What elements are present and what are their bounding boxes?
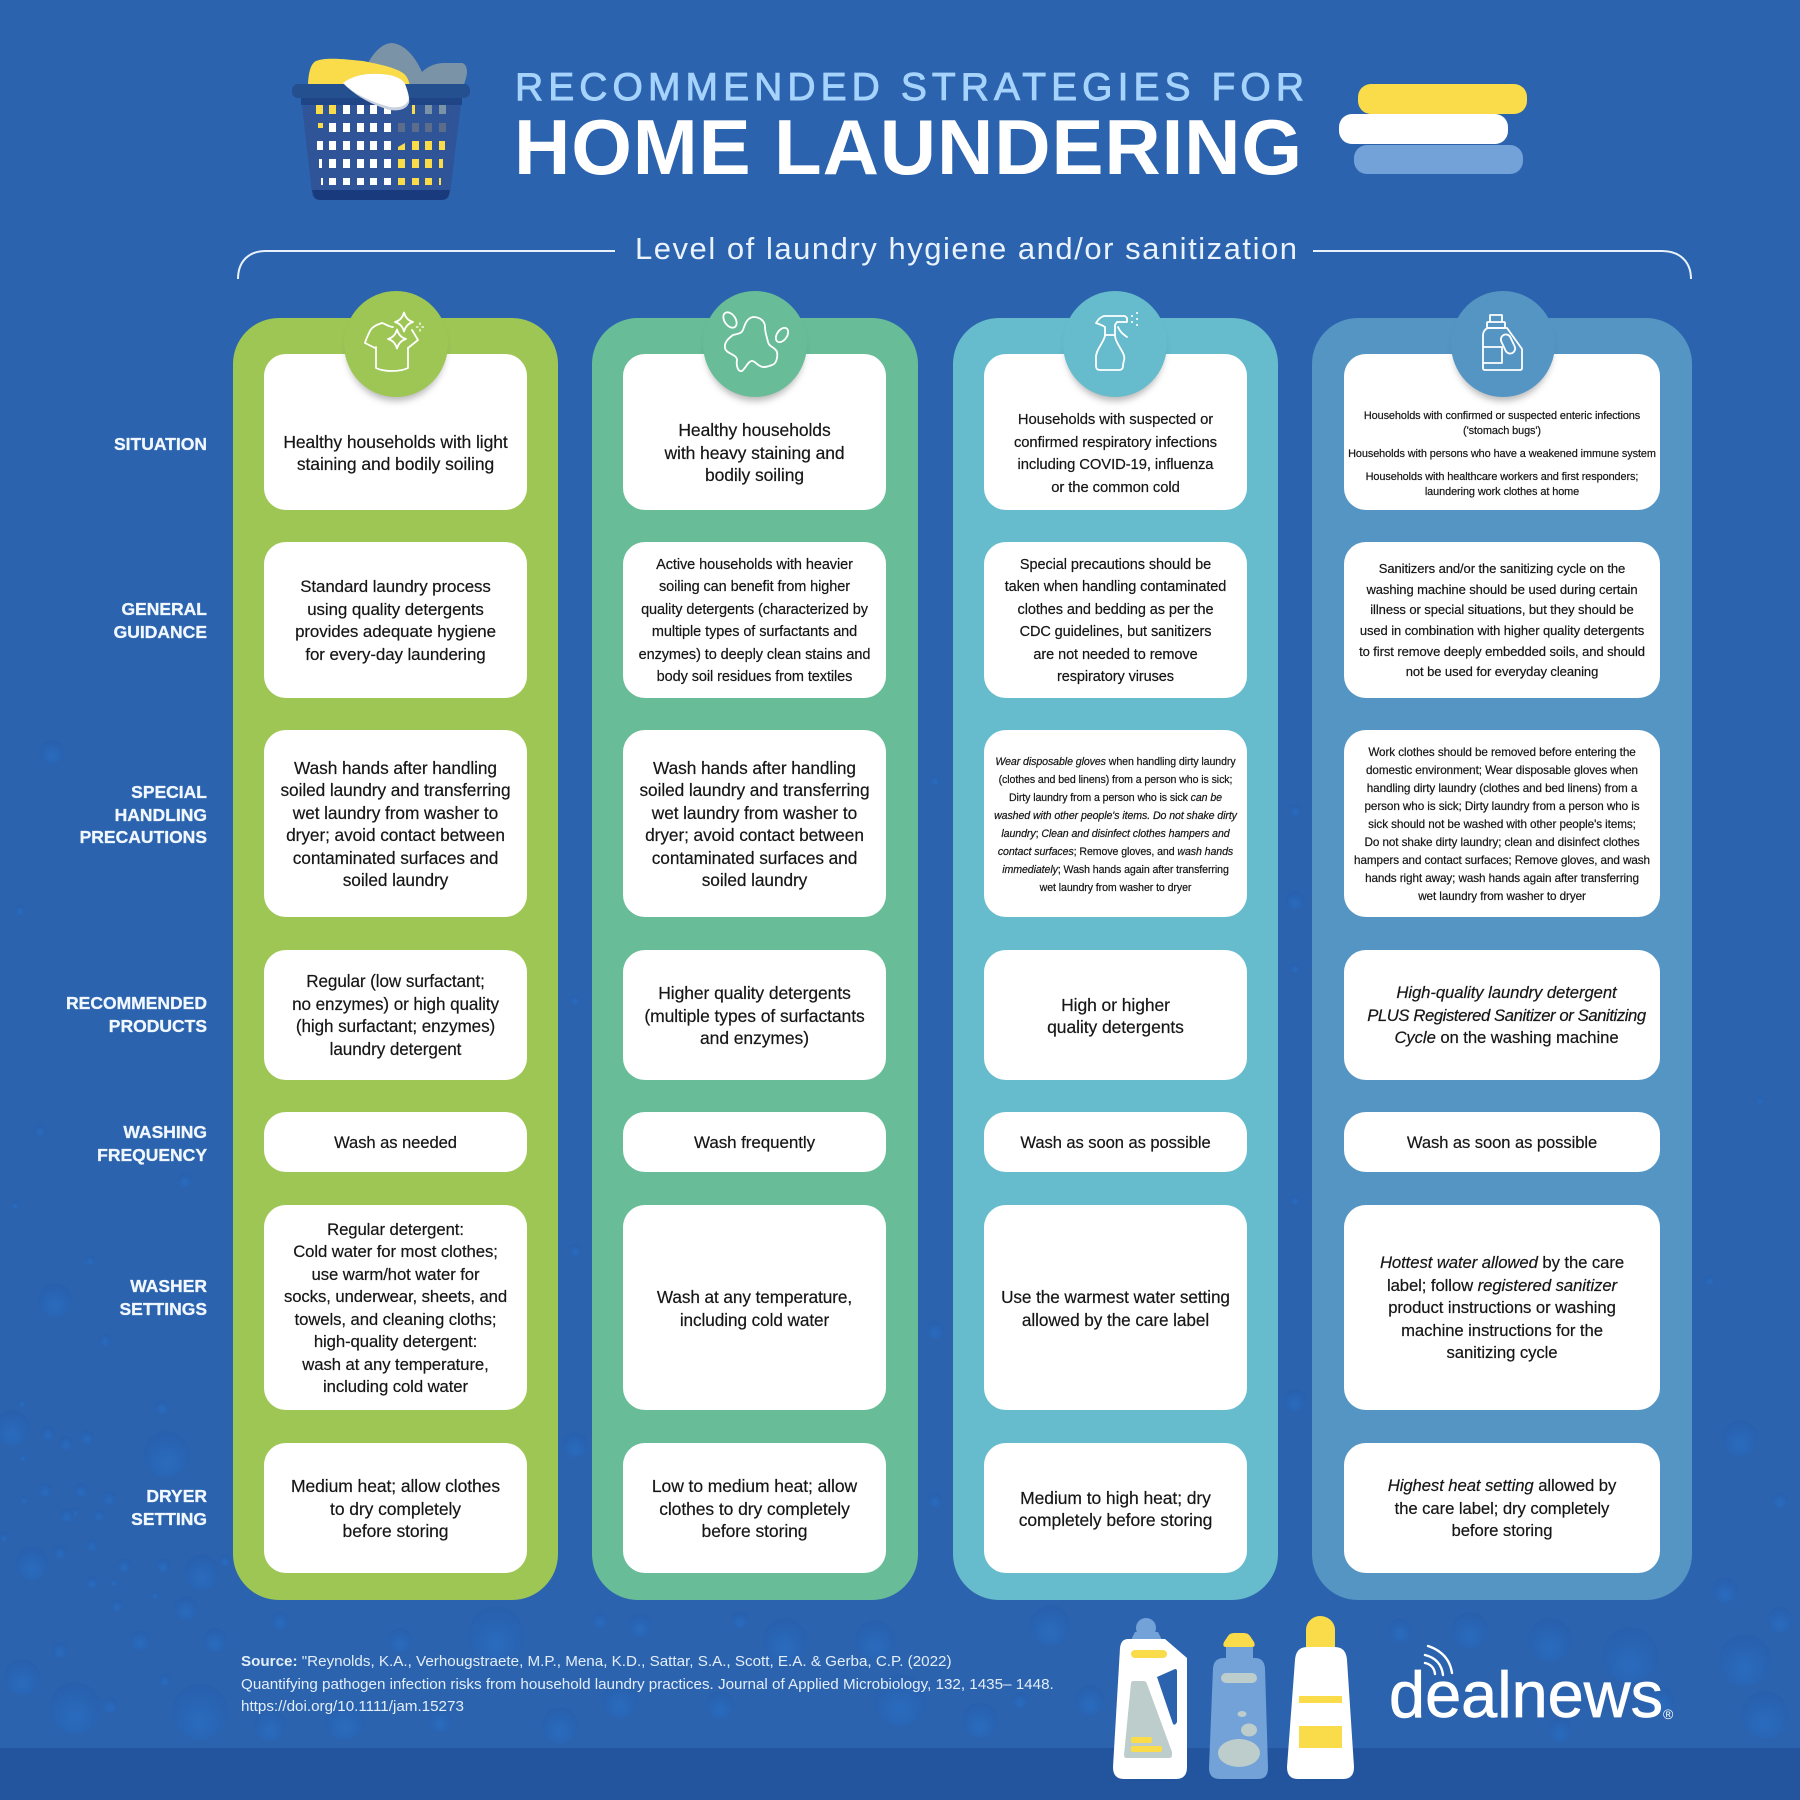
subtitle bracket: level of laundry hygiene: Level of laundry hygiene and/or sanitization bbox=[635, 231, 1297, 266]
washing frequency text bbox=[1344, 1112, 1660, 1172]
special handling text: Wash hands after handling bbox=[653, 758, 856, 778]
washer settings text: Regular detergent: bbox=[327, 1220, 464, 1238]
general guidance text bbox=[264, 542, 527, 698]
recommended products text: laundry detergent bbox=[330, 1040, 461, 1058]
special handling text: Do not shake dirty laundry; clean and disinfect clothes bbox=[1365, 836, 1639, 849]
special handling text: wet laundry from washer to dryer bbox=[1418, 890, 1586, 903]
dryer setting text: to dry completely bbox=[330, 1499, 461, 1519]
recommended products text: High-quality laundry detergent bbox=[1396, 983, 1617, 1002]
recommended products text: and enzymes) bbox=[700, 1028, 809, 1048]
general guidance text: enzymes) to deeply clean stains and bbox=[639, 646, 870, 662]
dryer setting text bbox=[1344, 1443, 1660, 1573]
situation text: Households with confirmed or suspected enteric infections bbox=[1364, 410, 1640, 422]
footer band bbox=[0, 1748, 1800, 1800]
dryer setting text: before storing bbox=[343, 1521, 448, 1541]
special handling text: domestic environment; Wear disposable gloves when bbox=[1366, 764, 1638, 777]
general guidance text: respiratory viruses bbox=[1057, 669, 1174, 685]
icon: detergent bottle bbox=[1451, 291, 1555, 397]
recommended products text: quality detergents bbox=[1047, 1017, 1184, 1037]
recommended products text bbox=[984, 950, 1247, 1080]
special handling text: soiled laundry bbox=[343, 870, 448, 890]
dryer setting text bbox=[264, 1443, 527, 1573]
washing frequency text: Wash as needed bbox=[334, 1133, 457, 1152]
washing frequency text: Wash as soon as possible bbox=[1407, 1133, 1597, 1152]
washing frequency text bbox=[984, 1112, 1247, 1172]
recommended products text: (high surfactant; enzymes) bbox=[296, 1017, 495, 1036]
row label: special handling precautions: HANDLING bbox=[115, 804, 207, 824]
special handling text: Dirty laundry from a person who is sick can be bbox=[1009, 792, 1222, 804]
situation text bbox=[984, 354, 1247, 510]
panel: healthy households, heavy soiling bbox=[592, 318, 918, 1600]
icon: folded towels stack bbox=[1339, 84, 1527, 174]
source citation: Quantifying pathogen infection risks from household laundry practices. Journal of Applied Microbiology, 132, 1435– 1448. bbox=[241, 1676, 1054, 1692]
row label: washer settings bbox=[119, 1276, 207, 1318]
washer settings text: Use the warmest water setting bbox=[1001, 1287, 1230, 1307]
washer settings text bbox=[984, 1205, 1247, 1410]
row label: special handling precautions bbox=[80, 782, 207, 847]
situation text: Households with suspected or bbox=[1018, 412, 1213, 428]
recommended products text: (multiple types of surfactants bbox=[644, 1006, 865, 1026]
row label: situation: SITUATION bbox=[114, 434, 207, 454]
row label: general guidance: GENERAL bbox=[121, 599, 207, 619]
subtitle bracket: level of laundry hygiene bbox=[237, 231, 1692, 279]
row label: recommended products: RECOMMENDED bbox=[66, 993, 207, 1013]
general guidance text: used in combination with higher quality detergents bbox=[1360, 623, 1644, 638]
special handling text: Wear disposable gloves when handling dirty laundry bbox=[995, 756, 1236, 768]
special handling text: soiled laundry and transferring bbox=[280, 780, 510, 800]
general guidance text: Sanitizers and/or the sanitizing cycle on the bbox=[1379, 561, 1625, 576]
washing frequency text bbox=[264, 1112, 527, 1172]
washer settings text: Cold water for most clothes; bbox=[293, 1242, 498, 1261]
washer settings text: including cold water bbox=[680, 1310, 829, 1330]
situation text: including COVID-19, influenza bbox=[1018, 457, 1213, 473]
panel: healthy households, light soiling bbox=[233, 318, 558, 1600]
special handling text: immediately; Wash hands again after transferring bbox=[1002, 864, 1229, 876]
special handling text: contact surfaces; Remove gloves, and wash hands bbox=[998, 846, 1233, 858]
special handling text: wet laundry from washer to dryer bbox=[1040, 882, 1191, 894]
general guidance text: multiple types of surfactants and bbox=[652, 624, 857, 640]
special handling text bbox=[984, 730, 1247, 917]
general guidance text: soiling can benefit from higher bbox=[659, 579, 850, 595]
washer settings text: wash at any temperature, bbox=[302, 1354, 489, 1374]
situation text bbox=[623, 354, 886, 510]
recommended products text bbox=[1344, 950, 1660, 1080]
dryer setting text: Medium to high heat; dry bbox=[1020, 1488, 1211, 1508]
recommended products text: Regular (low surfactant; bbox=[306, 972, 485, 991]
row label: general guidance bbox=[114, 599, 207, 642]
special handling text: wet laundry from washer to bbox=[652, 802, 857, 822]
washer settings text: towels, and cleaning cloths; bbox=[295, 1310, 496, 1328]
icon: spray bottle bbox=[1063, 291, 1167, 397]
general guidance text: Active households with heavier bbox=[656, 556, 853, 572]
special handling text: person who is sick; Dirty laundry from a person who is bbox=[1364, 800, 1640, 813]
special handling text: hands right away; wash hands again after transferring bbox=[1365, 872, 1639, 885]
row label: washing frequency bbox=[97, 1122, 207, 1165]
washing frequency text bbox=[623, 1112, 886, 1172]
washer settings text: machine instructions for the bbox=[1401, 1321, 1603, 1340]
special handling text bbox=[623, 730, 886, 917]
panel: enteric infections, weakened immunity, work clothes bbox=[1312, 318, 1692, 1600]
general guidance text: quality detergents (characterized by bbox=[641, 602, 868, 618]
recommended products text bbox=[264, 950, 527, 1080]
washer settings text: product instructions or washing bbox=[1388, 1298, 1616, 1317]
washer settings text: socks, underwear, sheets, and bbox=[284, 1287, 507, 1306]
special handling text: dryer; avoid contact between bbox=[645, 825, 864, 845]
dryer setting text: Medium heat; allow clothes bbox=[291, 1476, 500, 1496]
source citation: https://doi.org/10.1111/jam.15273 bbox=[241, 1698, 464, 1715]
logo: dealnews: dealnews bbox=[1389, 1658, 1663, 1731]
dryer setting text: Low to medium heat; allow bbox=[652, 1476, 857, 1496]
general guidance text: provides adequate hygiene bbox=[295, 622, 496, 641]
situation text: Healthy households bbox=[678, 420, 831, 440]
general guidance text: are not needed to remove bbox=[1033, 646, 1198, 662]
row label: recommended products bbox=[66, 993, 207, 1036]
general guidance text: washing machine should be used during certain bbox=[1366, 582, 1638, 597]
washer settings text bbox=[264, 1205, 527, 1410]
special handling text: hampers and contact surfaces; Remove gloves, and wash bbox=[1354, 854, 1650, 867]
situation text: Healthy households with light bbox=[283, 432, 508, 452]
general guidance text bbox=[1344, 542, 1660, 698]
dryer setting text: the care label; dry completely bbox=[1395, 1499, 1609, 1518]
row label: special handling precautions: SPECIAL bbox=[131, 782, 207, 802]
recommended products text bbox=[623, 950, 886, 1080]
general guidance text bbox=[623, 542, 886, 698]
washer settings text: Wash at any temperature, bbox=[657, 1287, 852, 1307]
row label: recommended products: PRODUCTS bbox=[109, 1016, 207, 1036]
dryer setting text bbox=[623, 1443, 886, 1573]
situation text: ('stomach bugs') bbox=[1463, 424, 1541, 436]
logo: dealnews: ® bbox=[1663, 1706, 1674, 1722]
general guidance text: Special precautions should be bbox=[1020, 556, 1211, 572]
washer settings text bbox=[623, 1205, 886, 1410]
situation text: Households with persons who have a weakened immune system bbox=[1348, 448, 1656, 460]
washing frequency text: Wash frequently bbox=[694, 1133, 815, 1152]
general guidance text: clothes and bedding as per the bbox=[1018, 602, 1213, 618]
dryer setting text: before storing bbox=[702, 1521, 807, 1541]
general guidance text: using quality detergents bbox=[307, 600, 484, 618]
dryer setting text: completely before storing bbox=[1019, 1510, 1212, 1530]
row label: washer settings: SETTINGS bbox=[119, 1298, 207, 1318]
situation text: with heavy staining and bbox=[664, 443, 845, 463]
special handling text: contaminated surfaces and bbox=[652, 848, 857, 868]
special handling text bbox=[1344, 730, 1660, 917]
bottle two bbox=[1209, 1633, 1268, 1779]
recommended products text: no enzymes) or high quality bbox=[292, 994, 499, 1014]
washer settings text: including cold water bbox=[323, 1377, 468, 1396]
dryer setting text bbox=[984, 1443, 1247, 1573]
special handling text: Wash hands after handling bbox=[294, 758, 497, 778]
row label: washer settings: WASHER bbox=[130, 1276, 207, 1296]
situation text: confirmed respiratory infections bbox=[1014, 434, 1217, 450]
situation text: bodily soiling bbox=[705, 465, 804, 485]
row label: general guidance: GUIDANCE bbox=[114, 622, 207, 642]
general guidance text: body soil residues from textiles bbox=[657, 669, 852, 685]
general guidance text: for every-day laundering bbox=[305, 644, 486, 664]
special handling text: laundry; Clean and disinfect clothes hampers and bbox=[1001, 828, 1230, 840]
special handling text: handling dirty laundry (clothes and bed linens) from a bbox=[1367, 782, 1637, 795]
special handling text: wet laundry from washer to bbox=[293, 802, 498, 822]
washer settings text: label; follow registered sanitizer bbox=[1387, 1276, 1617, 1295]
special handling text: dryer; avoid contact between bbox=[286, 825, 505, 845]
general guidance text: CDC guidelines, but sanitizers bbox=[1020, 624, 1211, 640]
washer settings text: Hottest water allowed by the care bbox=[1380, 1253, 1624, 1272]
washing frequency text: Wash as soon as possible bbox=[1020, 1133, 1211, 1152]
situation text: staining and bodily soiling bbox=[297, 454, 494, 474]
situation text: laundering work clothes at home bbox=[1425, 486, 1579, 498]
row label: dryer setting bbox=[131, 1486, 207, 1528]
washer settings text: allowed by the care label bbox=[1022, 1310, 1209, 1330]
general guidance text: illness or special situations, but they should be bbox=[1370, 602, 1634, 617]
icon: stain splat bbox=[703, 291, 807, 397]
recommended products text: Cycle on the washing machine bbox=[1394, 1028, 1619, 1047]
situation text: Households with healthcare workers and first responders; bbox=[1366, 470, 1638, 482]
special handling text: soiled laundry bbox=[702, 870, 807, 890]
special handling text: contaminated surfaces and bbox=[293, 848, 498, 868]
general guidance text bbox=[984, 542, 1247, 698]
dryer setting text: Highest heat setting allowed by bbox=[1388, 1476, 1616, 1495]
special handling text: (clothes and bed linens) from a person who is sick; bbox=[999, 774, 1232, 786]
row label: washing frequency: WASHING bbox=[123, 1122, 207, 1142]
special handling text bbox=[264, 730, 527, 917]
special handling text: soiled laundry and transferring bbox=[640, 780, 870, 800]
icon: sparkling shirt bbox=[344, 291, 448, 397]
row label: dryer setting: DRYER bbox=[146, 1486, 207, 1506]
source citation: Source: "Reynolds, K.A., Verhougstraete, M.P., Mena, K.D., Sattar, S.A., Scott, E.A. & Gerba, C.P. (2022) bbox=[241, 1653, 952, 1670]
general guidance text: Standard laundry process bbox=[300, 577, 491, 596]
special handling text: Work clothes should be removed before entering the bbox=[1368, 746, 1636, 759]
recommended products text: High or higher bbox=[1061, 994, 1170, 1014]
recommended products text: PLUS Registered Sanitizer or Sanitizing bbox=[1367, 1006, 1646, 1025]
panel: respiratory infections bbox=[953, 318, 1278, 1600]
special handling text: washed with other people's items. Do not shake dirty bbox=[994, 810, 1237, 822]
special handling text: sick should not be washed with other people's items; bbox=[1368, 818, 1636, 831]
washer settings text: use warm/hot water for bbox=[312, 1264, 479, 1284]
dryer setting text: clothes to dry completely bbox=[659, 1499, 850, 1519]
general guidance text: taken when handling contaminated bbox=[1005, 579, 1226, 595]
general guidance text: not be used for everyday cleaning bbox=[1406, 664, 1598, 679]
washer settings text: sanitizing cycle bbox=[1447, 1343, 1557, 1362]
icon: laundry basket bbox=[292, 43, 470, 200]
situation text: or the common cold bbox=[1051, 480, 1180, 496]
bottle one bbox=[1113, 1618, 1187, 1779]
recommended products text: Higher quality detergents bbox=[658, 983, 851, 1003]
row label: dryer setting: SETTING bbox=[131, 1508, 207, 1528]
bottle three bbox=[1287, 1616, 1354, 1779]
title: RECOMMENDED STRATEGIES FOR bbox=[515, 66, 1304, 109]
source citation bbox=[241, 1653, 1054, 1715]
title: HOME LAUNDERING bbox=[514, 103, 1302, 191]
row label: washing frequency: FREQUENCY bbox=[97, 1144, 207, 1164]
washer settings text bbox=[1344, 1205, 1660, 1410]
row label: special handling precautions: PRECAUTIONS bbox=[80, 827, 207, 847]
situation text bbox=[1344, 354, 1660, 510]
dryer setting text: before storing bbox=[1452, 1521, 1552, 1540]
washer settings text: high-quality detergent: bbox=[314, 1332, 477, 1351]
general guidance text: to first remove deeply embedded soils, and should bbox=[1359, 644, 1645, 659]
situation text bbox=[264, 354, 527, 510]
